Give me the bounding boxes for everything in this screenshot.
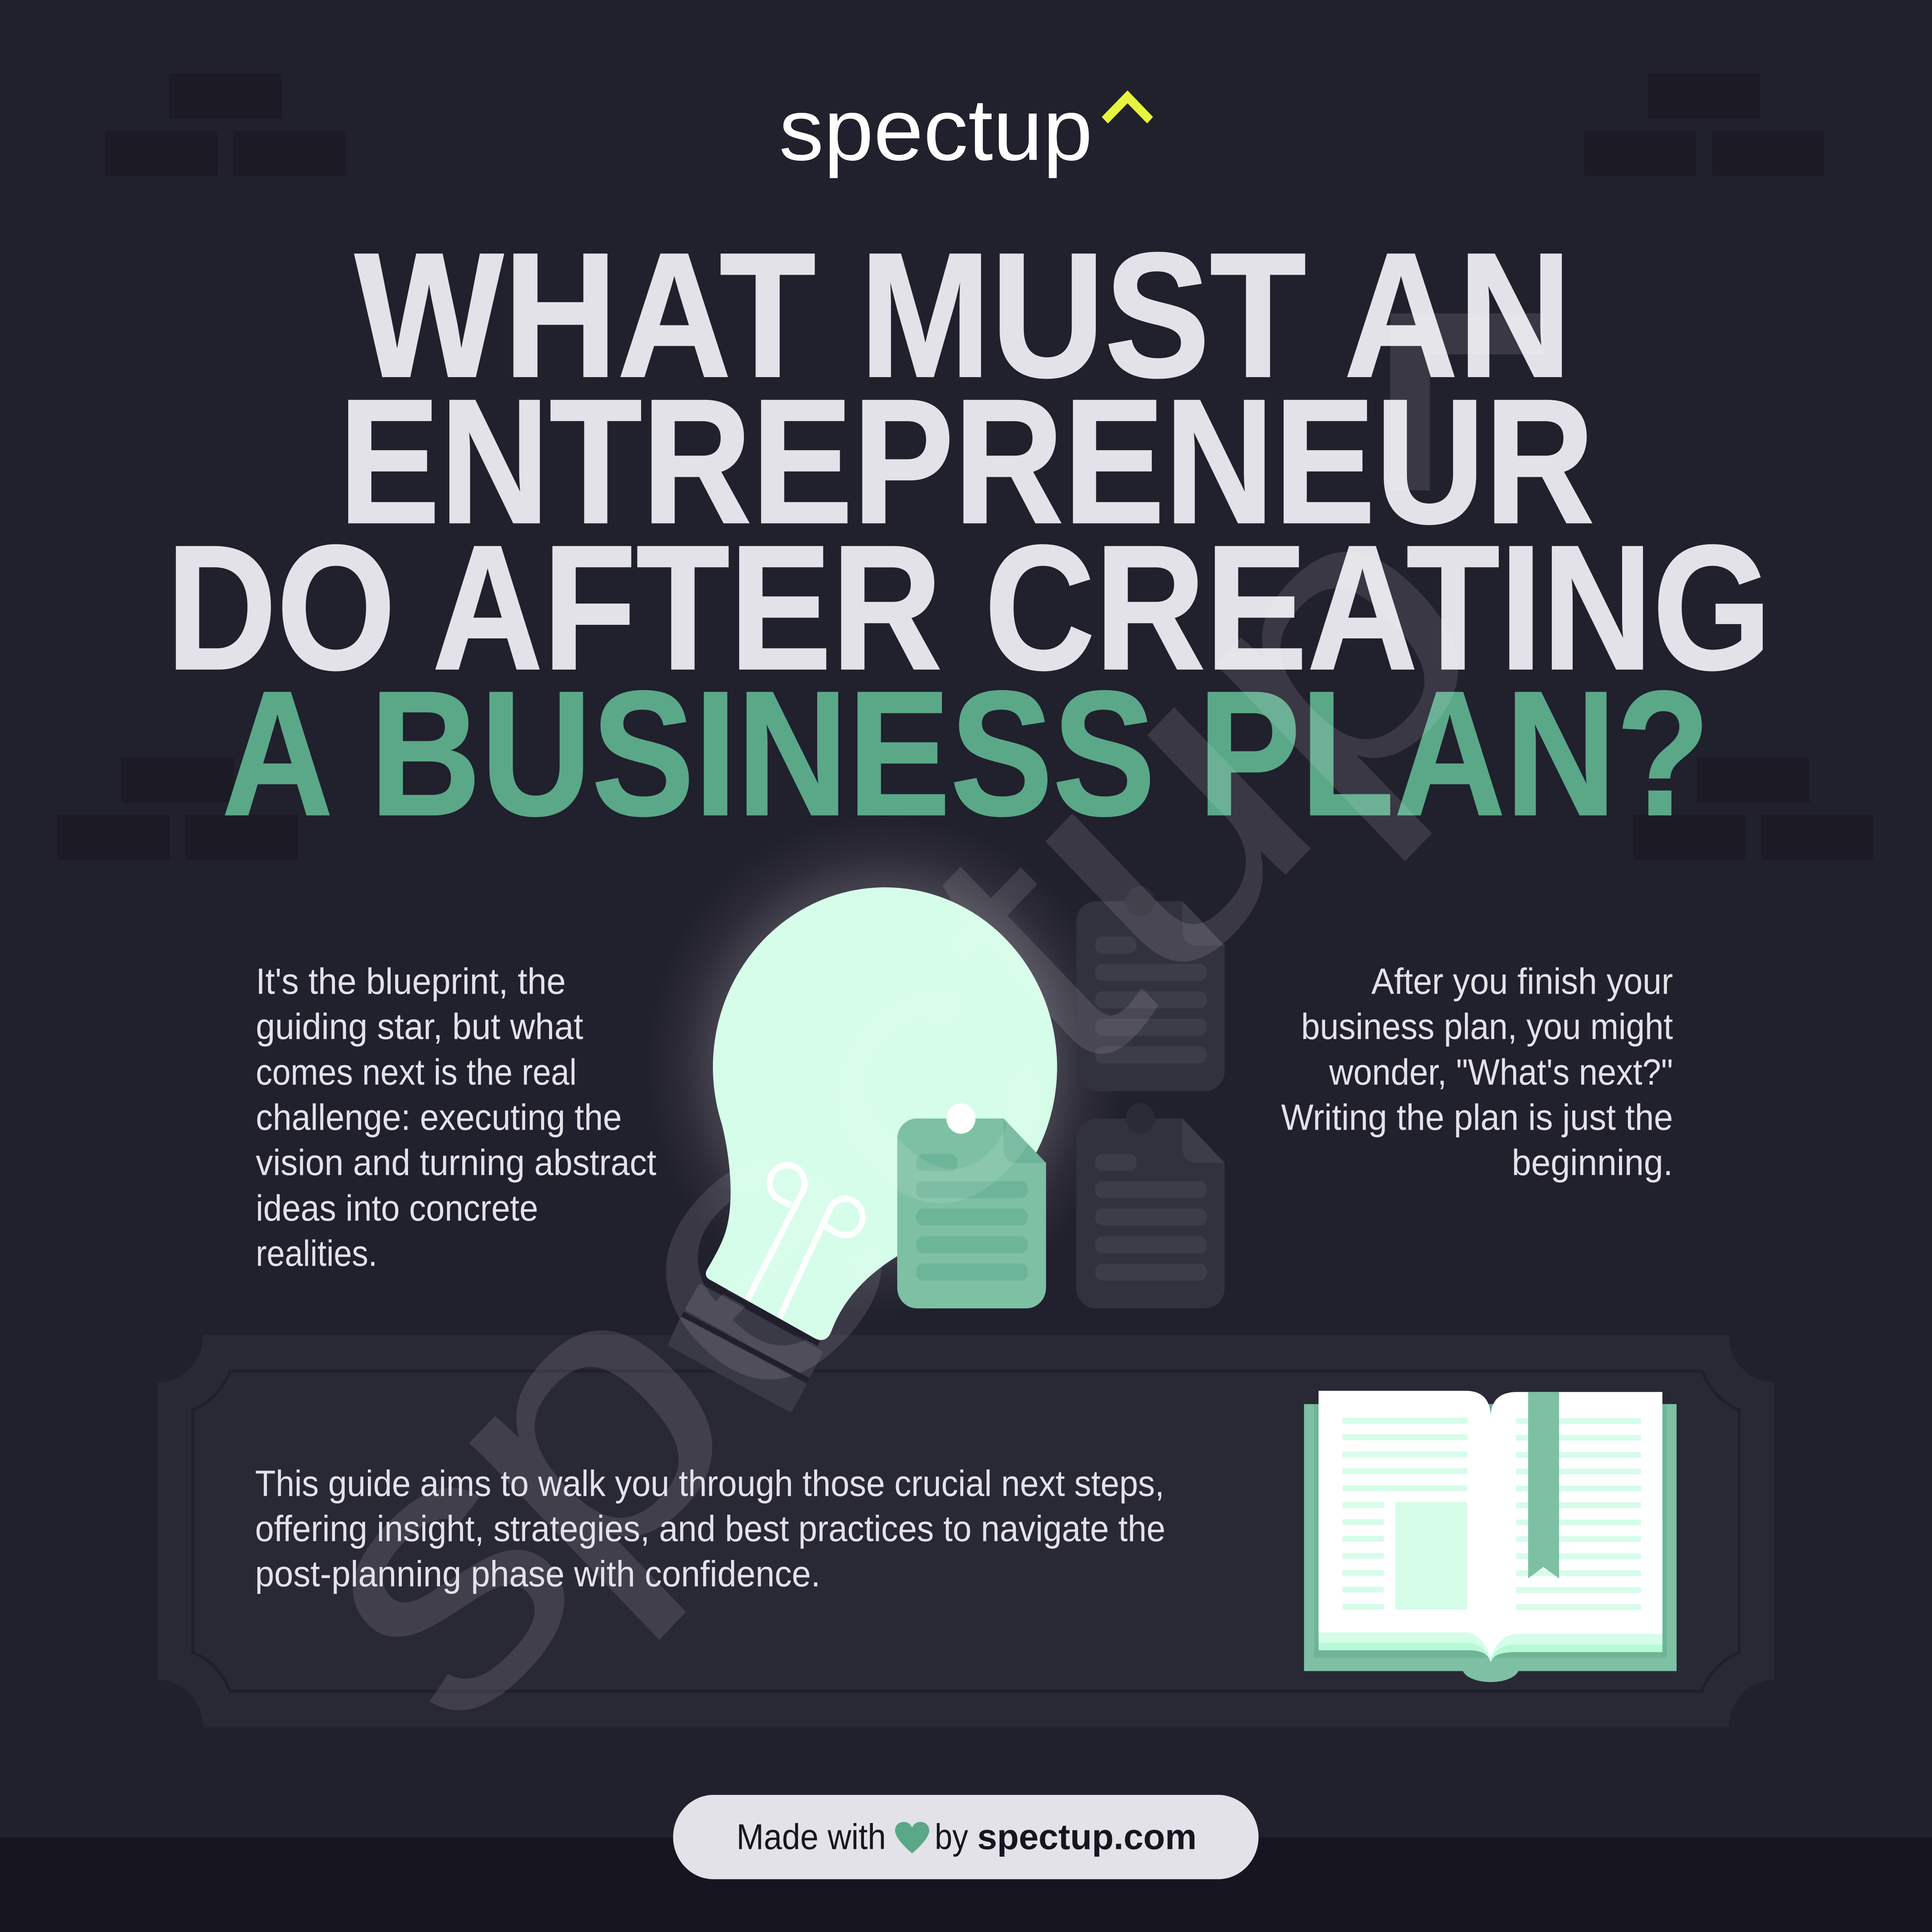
title: ENTREPRENEUR	[339, 362, 1594, 561]
bulb base gaps	[682, 1282, 819, 1380]
text block: guide description	[255, 1463, 1165, 1594]
watermark	[221, 313, 1557, 1802]
title: A BUSINESS PLAN?	[222, 655, 1710, 852]
icon: open book	[1304, 1391, 1677, 1682]
text block: left intro: comes next is the real	[256, 1051, 577, 1093]
text block: guide description: post-planning phase with confidence.	[255, 1553, 820, 1594]
text block: right intro: business plan, you might	[1301, 1006, 1673, 1047]
footer pill: by	[935, 1817, 968, 1857]
title	[166, 216, 1772, 852]
text block: left intro: It's the blueprint, the	[256, 961, 566, 1002]
decorative bricks: middle left	[58, 758, 298, 860]
text block: right intro: beginning.	[1512, 1142, 1673, 1183]
icon: light bulb	[671, 887, 1057, 1410]
text block: left intro: vision and turning abstract	[256, 1142, 656, 1183]
text block: left intro	[256, 961, 656, 1274]
text block: guide description: This guide aims to walk you through those crucial next steps,	[255, 1463, 1164, 1504]
text block: right intro: Writing the plan is just the	[1281, 1097, 1673, 1138]
panel: guide intro	[158, 1335, 1774, 1727]
text block: right intro: After you finish your	[1371, 961, 1673, 1002]
text block: left intro: realities.	[256, 1233, 377, 1274]
icon: green document	[897, 1103, 1046, 1308]
icon: grey document bottom	[1076, 1103, 1225, 1308]
text block: left intro: guiding star, but what	[256, 1006, 583, 1047]
text block: guide description: offering insight, strategies, and best practices to navigate the	[255, 1508, 1165, 1549]
logo: spectup	[779, 81, 1093, 179]
text block: left intro: challenge: executing the	[256, 1097, 622, 1138]
decorative bricks: middle right	[1633, 758, 1873, 860]
footer pill	[673, 1795, 1259, 1879]
footer band	[0, 1837, 1932, 1932]
footer pill: spectup.com	[977, 1817, 1197, 1857]
watermark: s	[221, 1350, 652, 1800]
footer pill: Made with	[736, 1817, 886, 1857]
decorative bricks: top right	[1584, 74, 1824, 176]
icon: grey document top	[1076, 886, 1225, 1091]
text block: right intro: wonder, "What's next?"	[1329, 1051, 1673, 1093]
watermark: pectup	[352, 407, 1557, 1664]
text block: right intro	[1281, 961, 1673, 1183]
decorative bricks: top left	[105, 74, 346, 176]
title: WHAT MUST AN	[355, 216, 1572, 414]
text block: left intro: ideas into concrete	[256, 1187, 538, 1228]
title: DO AFTER CREATING	[166, 509, 1772, 707]
bulb glow	[645, 815, 1125, 1316]
